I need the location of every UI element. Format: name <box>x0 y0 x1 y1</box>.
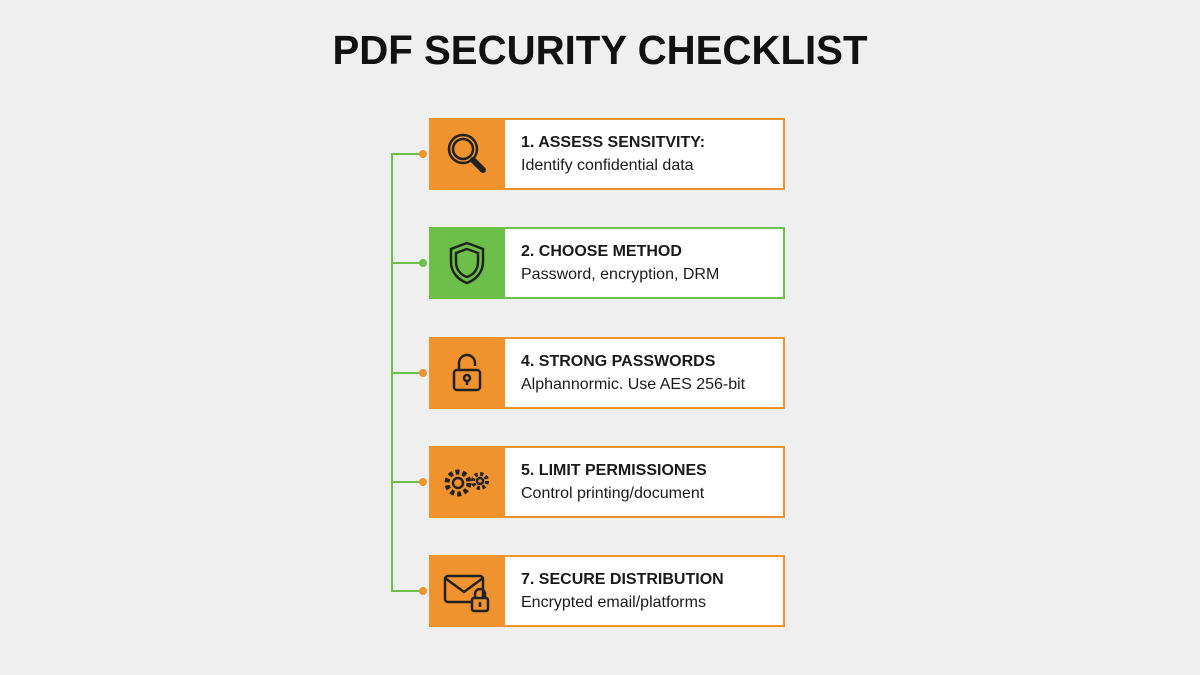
card 5: Encrypted email/platforms <box>521 594 706 611</box>
card 4 <box>429 446 785 518</box>
connector line <box>391 153 393 590</box>
card 3 <box>429 337 785 409</box>
card 5 <box>429 555 785 627</box>
icon: lock <box>428 336 504 408</box>
icon: shield <box>428 226 504 298</box>
card 1: 1. ASSESS SENSITVITY: <box>521 134 705 151</box>
card 3: 4. STRONG PASSWORDS <box>521 353 715 370</box>
card 3: Alphannormic. Use AES 256-bit <box>521 376 745 393</box>
title: PDF SECURITY CHECKLIST <box>332 27 868 73</box>
card 1 <box>429 118 785 190</box>
card 4: 5. LIMIT PERMISSIONES <box>521 462 707 479</box>
card 4: Control printing/document <box>521 485 704 502</box>
card 5: 7. SECURE DISTRIBUTION <box>521 571 724 588</box>
icon: envelope with lock <box>428 554 504 626</box>
card 2: 2. CHOOSE METHOD <box>521 243 682 260</box>
card 2 <box>429 227 785 299</box>
icon: gears <box>428 446 504 518</box>
card 2: Password, encryption, DRM <box>521 266 719 283</box>
icon: magnifier <box>428 118 504 190</box>
card 1: Identify confidential data <box>521 157 694 174</box>
